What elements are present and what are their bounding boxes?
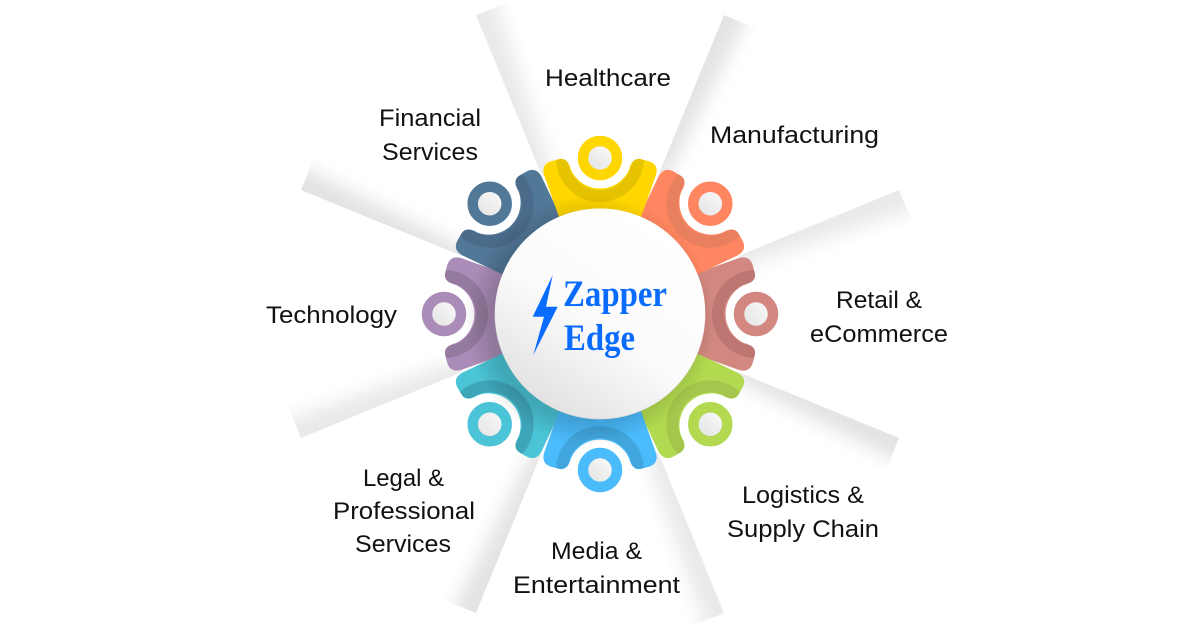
- hub shadow: [465, 195, 715, 445]
- label: financial services: Financial: [379, 105, 481, 132]
- segment: technology (purple): [422, 257, 503, 371]
- segment: logistics and supply chain (green): [640, 354, 744, 458]
- brand name: Zapper: [563, 274, 667, 315]
- segment: media and entertainment (blue): [543, 411, 657, 492]
- label: technology: Technology: [266, 302, 397, 329]
- label: financial services: Services: [382, 139, 478, 166]
- background rays: [292, 6, 908, 622]
- segment: financial services (navy): [456, 170, 560, 274]
- label: retail and ecommerce: Retail &: [836, 287, 922, 314]
- label: logistics and supply chain: Supply Chain: [727, 516, 879, 543]
- brand name: [563, 274, 667, 359]
- label: legal and professional services: Professional: [333, 498, 475, 525]
- label: retail and ecommerce: eCommerce: [810, 321, 948, 348]
- icon: lightning bolt: [533, 275, 558, 355]
- centre hub logo: [495, 208, 705, 418]
- label: financial services: [379, 105, 481, 166]
- label: media and entertainment: Entertainment: [513, 572, 680, 599]
- segment: manufacturing (orange): [640, 170, 744, 274]
- segment: legal and professional services (teal): [456, 354, 560, 458]
- label: logistics and supply chain: Logistics &: [742, 482, 864, 509]
- label: logistics and supply chain: [727, 482, 879, 543]
- label: media and entertainment: Media &: [551, 538, 642, 565]
- segment: retail and ecommerce (rose): [697, 257, 778, 371]
- label: legal and professional services: Legal &: [363, 465, 444, 492]
- segment: healthcare (yellow): [543, 136, 657, 217]
- label: legal and professional services: [333, 465, 475, 558]
- label: retail and ecommerce: [810, 287, 948, 348]
- label: healthcare: Healthcare: [545, 65, 671, 92]
- brand name: Edge: [564, 318, 635, 359]
- label: legal and professional services: Services: [355, 531, 451, 558]
- label: manufacturing: Manufacturing: [710, 122, 879, 149]
- label: media and entertainment: [513, 538, 680, 599]
